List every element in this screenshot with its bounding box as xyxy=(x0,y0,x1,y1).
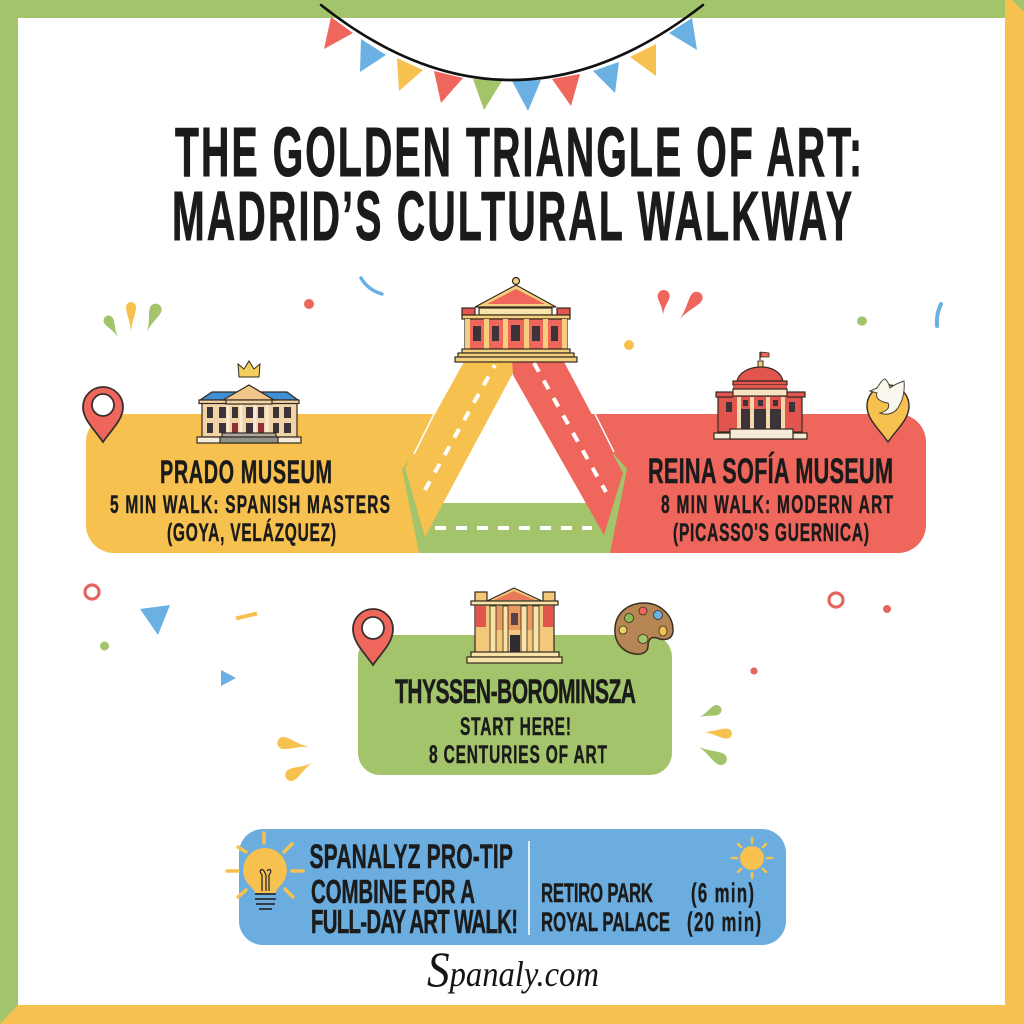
pro-tip text xyxy=(310,837,518,940)
bunting xyxy=(321,5,703,111)
nearby sights list: (20 min) xyxy=(687,907,761,937)
Thyssen details: 8 CENTURIES OF ART xyxy=(429,741,607,769)
icon: crown xyxy=(238,361,260,377)
Thyssen details xyxy=(429,713,607,769)
panel: pro-tip xyxy=(239,829,786,945)
icon: Reina Sofía museum xyxy=(714,352,807,439)
Thyssen heading: THYSSEN-BOROMINSZA xyxy=(395,672,636,710)
Prado details: 5 MIN WALK: SPANISH MASTERS xyxy=(110,491,390,519)
icon: Prado museum xyxy=(197,385,301,443)
Reina Sofía details: 8 MIN WALK: MODERN ART xyxy=(661,491,893,519)
triangle walkway xyxy=(402,360,627,553)
Reina Sofía details: (PICASSO'S GUERNICA) xyxy=(673,519,869,547)
panel: Thyssen-Bornemisza xyxy=(358,635,672,775)
confetti decorations xyxy=(85,278,941,783)
Prado details: (GOYA, VELÁZQUEZ) xyxy=(167,519,336,547)
Prado details xyxy=(110,491,390,547)
icon: central museum xyxy=(455,278,577,362)
icon: gold pin with dove xyxy=(867,379,909,442)
pro-tip text: COMBINE FOR A xyxy=(311,873,475,910)
icon: lightbulb xyxy=(227,833,303,909)
Reina Sofía details xyxy=(661,491,893,547)
icon: Thyssen museum xyxy=(467,588,562,663)
nearby sights list xyxy=(541,878,761,937)
title xyxy=(172,114,862,256)
icon: red map pin, Prado xyxy=(83,387,123,442)
Prado heading: PRADO MUSEUM xyxy=(160,454,332,490)
panel: Reina Sofía Museum xyxy=(585,414,926,553)
brand signature: Spanaly.com xyxy=(427,941,599,997)
nearby sights list: ROYAL PALACE xyxy=(541,907,670,937)
title: THE GOLDEN TRIANGLE OF ART: xyxy=(175,114,862,192)
icon: red map pin, Thyssen xyxy=(353,609,393,665)
nearby sights list: (6 min) xyxy=(691,878,754,908)
panel: Prado Museum xyxy=(86,414,445,553)
icon: sun xyxy=(732,838,772,878)
Reina Sofía heading: REINA SOFÍA MUSEUM xyxy=(648,451,893,491)
title: MADRID’S CULTURAL WALKWAY xyxy=(172,178,852,256)
pro-tip text: SPANALYZ PRO-TIP xyxy=(310,837,513,875)
icon: paint palette xyxy=(615,603,673,654)
nearby sights list: RETIRO PARK xyxy=(541,878,653,908)
pro-tip text: FULL-DAY ART WALK! xyxy=(311,903,518,940)
Thyssen details: START HERE! xyxy=(460,713,571,741)
